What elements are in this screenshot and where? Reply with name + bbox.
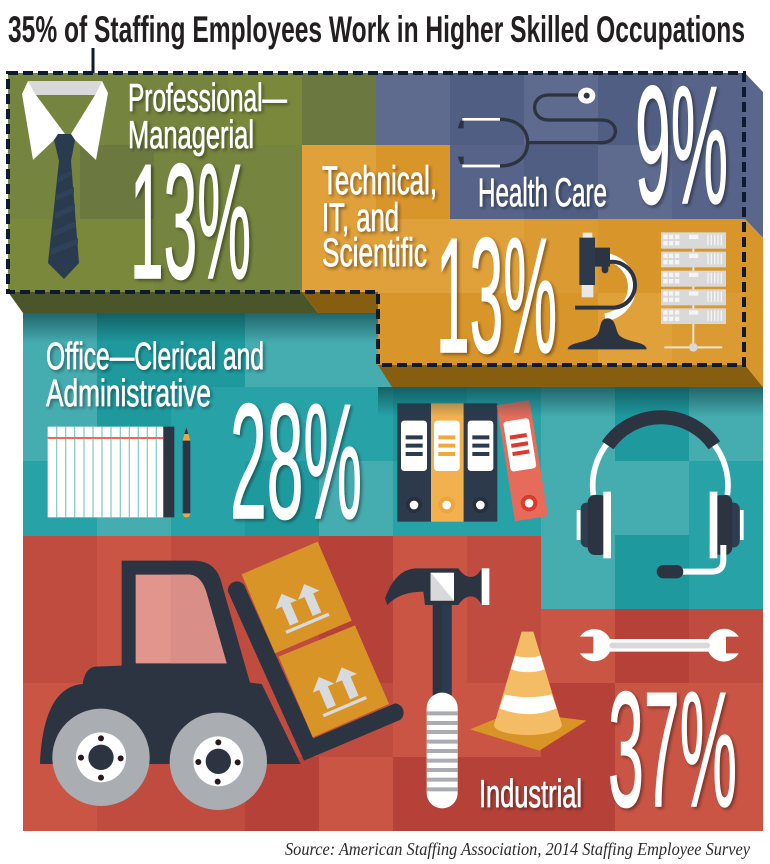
label: office clerical and administrative: Administrative xyxy=(46,373,211,415)
label: industrial: Industrial xyxy=(479,773,582,816)
panel: office clerical and administrative: 28% xyxy=(230,370,362,553)
label: office clerical and administrative: Office—Clerical and xyxy=(46,336,264,378)
icon: headset xyxy=(577,417,744,578)
icon: notepad and pencil xyxy=(48,427,190,517)
faces of orange panel xyxy=(302,219,763,387)
lower face of green panel xyxy=(8,292,318,313)
icon: hammer xyxy=(385,568,489,808)
dashed outline: higher skilled occupations bracket xyxy=(8,48,744,365)
label: technical it and scientific: Scientific xyxy=(322,231,427,275)
label: technical it and scientific: Technical, xyxy=(322,159,437,203)
source note: Source: American Staffing Association, 2014 Staffing Employee Survey xyxy=(285,839,750,859)
icon: binders xyxy=(397,400,548,522)
icon: forklift xyxy=(40,542,404,810)
label: health care: Health Care xyxy=(478,171,607,215)
label: office clerical and administrative xyxy=(46,336,264,415)
panel: technical it and scientific: 13% xyxy=(436,204,557,387)
label: technical it and scientific xyxy=(322,159,437,275)
icon: stethoscope xyxy=(458,88,615,166)
label: technical it and scientific: IT, and xyxy=(322,196,399,240)
label: professional managerial: Professional— xyxy=(128,77,287,120)
shadow under upper panels xyxy=(23,313,763,417)
icon: shirt collar and tie xyxy=(22,81,108,279)
panel: health care xyxy=(376,51,763,239)
icon: wrench xyxy=(580,629,739,661)
panel: industrial xyxy=(23,536,763,841)
panel: professional managerial xyxy=(8,73,377,313)
icon: server rack xyxy=(661,232,726,352)
panel: office clerical and administrative xyxy=(23,313,763,610)
icon: traffic cone xyxy=(470,632,587,751)
panel: professional managerial: 13% xyxy=(130,130,251,313)
label: professional managerial: Managerial xyxy=(128,114,254,157)
icon: microscope xyxy=(568,233,647,349)
label: professional managerial xyxy=(128,77,287,157)
side face of blue panel xyxy=(745,73,763,238)
panel: technical it and scientific xyxy=(302,145,763,387)
